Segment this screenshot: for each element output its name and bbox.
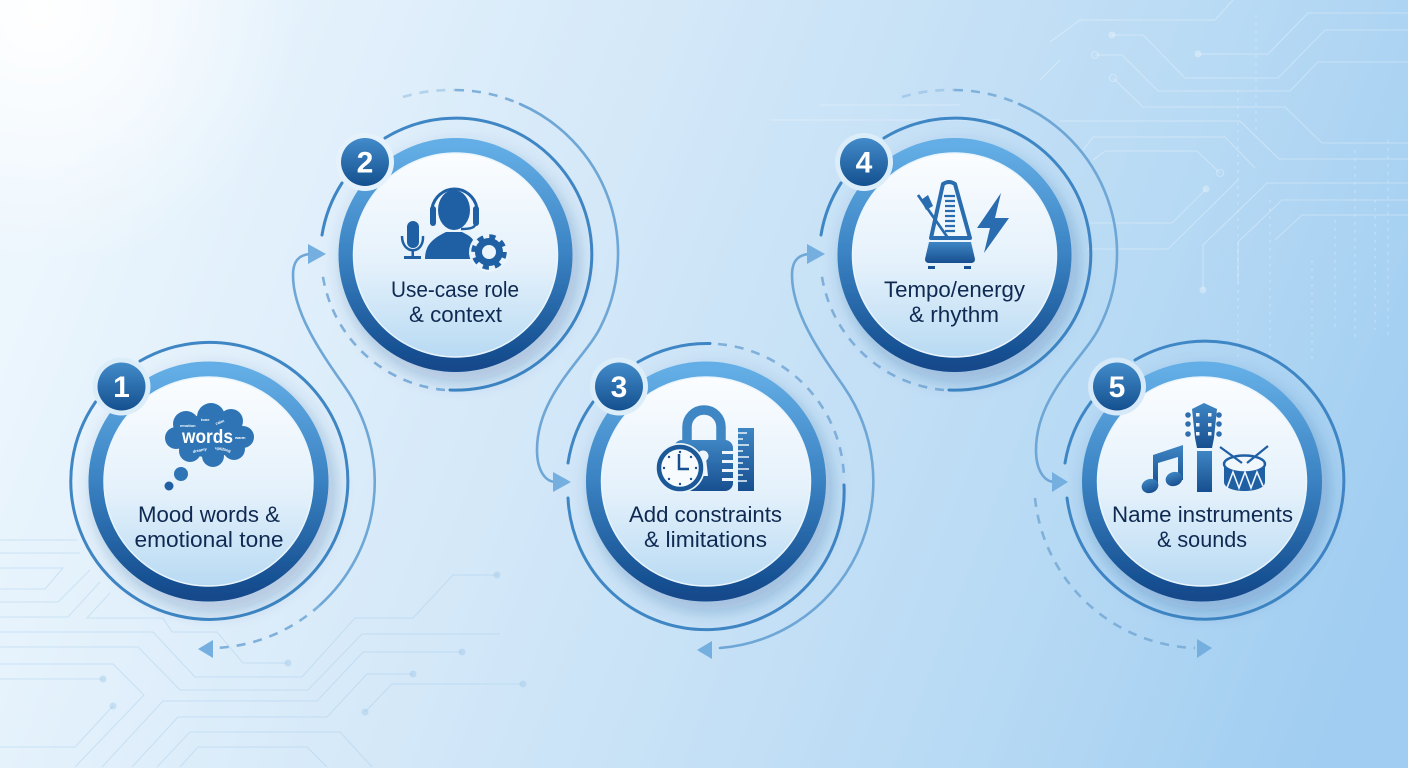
badge 1: 1 bbox=[113, 371, 130, 404]
disc 5 bbox=[1098, 377, 1306, 586]
outer ring 3 bbox=[568, 343, 844, 630]
label 5: & sounds bbox=[1157, 527, 1247, 552]
label 4: Tempo/energy bbox=[884, 277, 1025, 302]
badge 3: 3 bbox=[611, 371, 627, 404]
panel: step 1 bbox=[71, 342, 348, 619]
label 1 bbox=[134, 502, 284, 552]
connector: step 4 to step 5 bbox=[902, 90, 1117, 492]
label 4: & rhythm bbox=[909, 302, 999, 327]
badge 5 bbox=[1088, 358, 1146, 416]
badge 1 bbox=[92, 358, 150, 416]
main ring 5 bbox=[1090, 369, 1314, 594]
arrow: exit bbox=[1197, 639, 1212, 658]
label 5 bbox=[1112, 502, 1293, 552]
disc 3 bbox=[602, 377, 810, 586]
icon: metronome and lightning bolt bbox=[918, 182, 1009, 269]
arrow: into step 2 bbox=[308, 244, 326, 264]
icon: person with headset, microphone and gear bbox=[402, 189, 509, 272]
label 1: emotional tone bbox=[134, 527, 284, 552]
label 3: & limitations bbox=[644, 527, 767, 552]
label 2: & context bbox=[409, 302, 502, 327]
connector: step 3 to step 4 bbox=[720, 244, 873, 648]
main ring 1 bbox=[96, 369, 321, 594]
icon: padlock, clock and ruler bbox=[655, 410, 754, 493]
outer ring 5 bbox=[1065, 341, 1344, 619]
panel: step 2 bbox=[322, 118, 592, 390]
main ring 3 bbox=[594, 369, 818, 594]
connector: step 1 back from step 2 bbox=[215, 244, 375, 648]
icon: thought cloud with words: uplifting bbox=[215, 445, 232, 453]
label 3 bbox=[629, 502, 782, 552]
badge 3 bbox=[590, 358, 648, 416]
outer ring 4 bbox=[821, 118, 1091, 390]
outer ring 2 bbox=[322, 118, 592, 390]
icon: music note, guitar and drum bbox=[1140, 403, 1268, 495]
disc 2 bbox=[354, 153, 558, 357]
label 2 bbox=[391, 277, 519, 327]
label 1: Mood words & bbox=[138, 502, 280, 527]
badge 2 bbox=[336, 133, 394, 191]
badge 4 bbox=[835, 133, 893, 191]
icon: thought cloud with words: tone bbox=[201, 417, 210, 422]
panel: step 4 bbox=[821, 118, 1091, 390]
label 5: Name instruments bbox=[1112, 502, 1293, 527]
disc 4 bbox=[852, 153, 1056, 357]
icon: thought cloud with words: warm bbox=[234, 435, 246, 440]
label 3: Add constraints bbox=[629, 502, 782, 527]
badge 5: 5 bbox=[1109, 371, 1125, 404]
badge 4: 4 bbox=[856, 146, 873, 180]
circuit pattern: top right bbox=[770, 0, 1408, 360]
panel: step 5 bbox=[1065, 341, 1344, 619]
main ring 4 bbox=[845, 146, 1064, 364]
icon: thought cloud with words: dreamy bbox=[192, 446, 208, 454]
connector: step 2 to step 3 bbox=[403, 90, 618, 492]
icon: thought cloud with words bbox=[164, 403, 254, 490]
label 2: Use-case role bbox=[391, 277, 519, 302]
disc 1 bbox=[104, 377, 313, 586]
arrow: dashed return below step 1 bbox=[198, 640, 213, 658]
main ring 2 bbox=[346, 146, 565, 364]
circuit pattern: bottom left bbox=[0, 540, 526, 767]
arrow: return below step 3 bbox=[697, 641, 712, 659]
badge 2: 2 bbox=[357, 146, 373, 180]
arrow: into step 4 bbox=[807, 244, 825, 264]
label 4 bbox=[884, 277, 1025, 327]
arrow: into step 3 bbox=[553, 472, 571, 492]
icon: thought cloud with words: calm bbox=[215, 418, 225, 426]
arrow: into step 5 bbox=[1052, 472, 1068, 492]
outer ring 1 bbox=[71, 342, 348, 619]
icon: thought cloud with words: words bbox=[181, 427, 233, 448]
connector: dashed exit below step 5 bbox=[1035, 498, 1212, 658]
panel: step 3 bbox=[568, 343, 844, 630]
icon: thought cloud with words: emotion bbox=[180, 423, 196, 428]
